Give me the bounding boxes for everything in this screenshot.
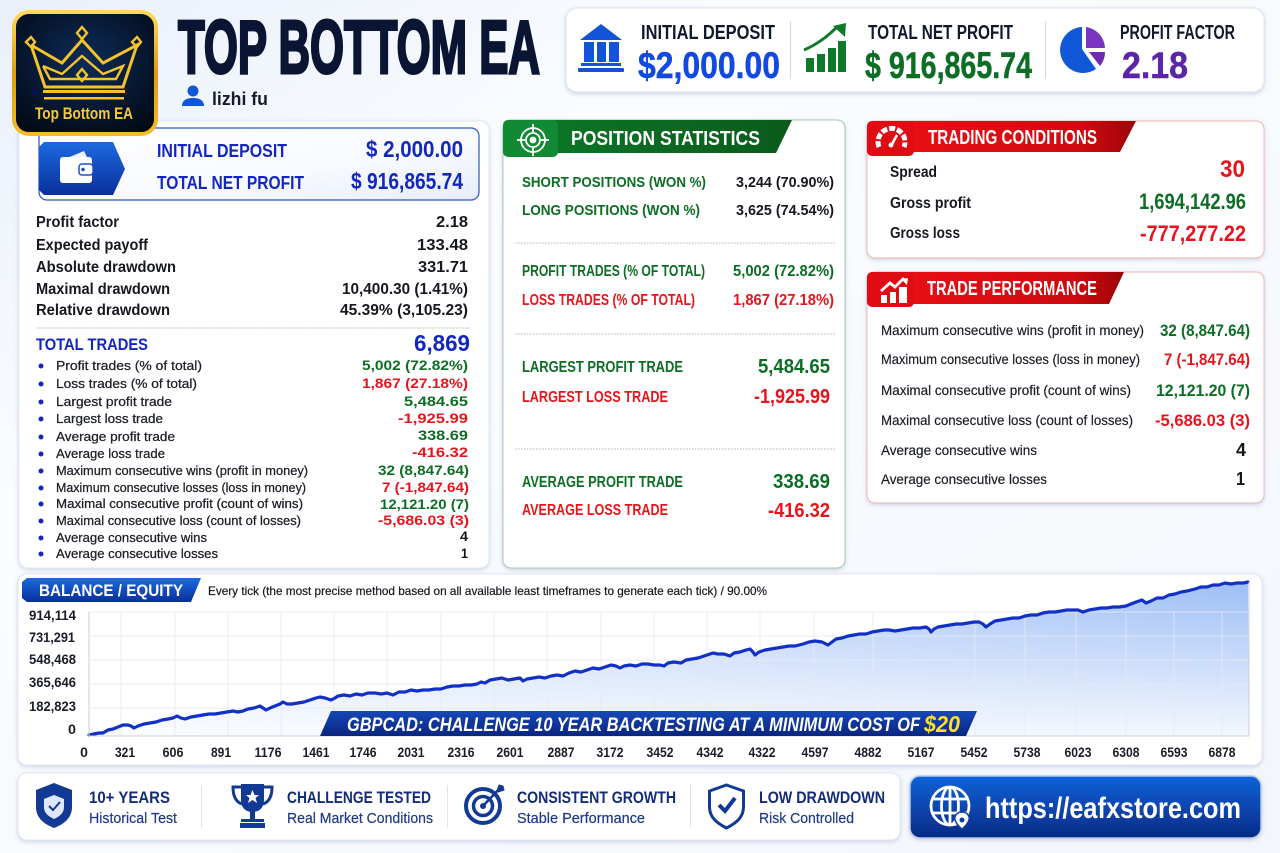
condition rows: Gross profit bbox=[890, 195, 972, 212]
deposit box: $ 2,000.00 bbox=[366, 136, 463, 162]
y axis labels: 548,468 bbox=[29, 651, 76, 667]
trade list values bbox=[362, 357, 469, 561]
feature: challenge tested: Real Market Conditions bbox=[287, 810, 433, 827]
average trade rows: -416.32 bbox=[768, 500, 830, 522]
trade list values: 338.69 bbox=[418, 427, 468, 443]
performance labels: Average consecutive losses bbox=[881, 471, 1047, 487]
x axis labels: 6023 bbox=[1064, 744, 1092, 760]
logo badge: Top Bottom EA bbox=[35, 104, 133, 123]
x axis labels: 1461 bbox=[302, 744, 330, 760]
trade list labels: Largest loss trade bbox=[56, 412, 163, 426]
profit and loss rows: 1,867 (27.18%) bbox=[733, 292, 834, 309]
feature: years: Historical Test bbox=[89, 810, 178, 827]
feature: consistent growth: CONSISTENT GROWTH bbox=[517, 788, 676, 807]
performance values: 4 bbox=[1236, 440, 1246, 460]
performance labels: Maximal consecutive profit (count of wins) bbox=[881, 382, 1131, 398]
deposit box: TOTAL NET PROFIT bbox=[157, 173, 304, 193]
section header: POSITION STATISTICS bbox=[571, 127, 760, 150]
position rows: LONG POSITIONS (WON %) bbox=[522, 202, 700, 219]
largest trade rows: LARGEST LOSS TRADE bbox=[522, 389, 668, 406]
feature: consistent growth: Stable Performance bbox=[517, 810, 645, 827]
profit and loss rows: LOSS TRADES (% OF TOTAL) bbox=[522, 292, 695, 309]
position rows: SHORT POSITIONS (WON %) bbox=[522, 174, 706, 191]
trade list values: 4 bbox=[460, 528, 468, 544]
key metrics: 331.71 bbox=[418, 259, 468, 276]
performance values: 1 bbox=[1236, 469, 1245, 489]
position rows bbox=[522, 174, 834, 219]
position rows: 3,625 (74.54%) bbox=[736, 202, 834, 219]
trade list labels: Average consecutive wins bbox=[56, 531, 207, 545]
y axis labels: 731,291 bbox=[29, 629, 75, 645]
average trade rows: 338.69 bbox=[773, 471, 830, 493]
y axis labels bbox=[29, 607, 76, 737]
panel: trade performance bbox=[867, 272, 1264, 503]
stat: initial deposit: INITIAL DEPOSIT bbox=[641, 22, 775, 44]
section header bbox=[867, 272, 1124, 307]
feature: consistent growth bbox=[466, 785, 676, 827]
performance labels: Average consecutive wins bbox=[881, 442, 1037, 458]
icon: target bbox=[517, 124, 549, 156]
x axis labels: 5167 bbox=[908, 744, 935, 760]
performance labels: Maximal consecutive loss (count of losses) bbox=[881, 412, 1133, 428]
performance values: -5,686.03 (3) bbox=[1155, 411, 1250, 430]
line chart bbox=[89, 582, 1249, 736]
trade list labels: Maximum consecutive wins (profit in money) bbox=[56, 464, 308, 478]
position rows: 3,244 (70.90%) bbox=[736, 174, 834, 191]
condition rows: Gross loss bbox=[890, 225, 960, 242]
trade list values: 1,867 (27.18%) bbox=[362, 375, 468, 391]
y axis labels: 365,646 bbox=[29, 674, 76, 690]
key metrics: Absolute drawdown bbox=[36, 259, 176, 276]
deposit box: INITIAL DEPOSIT bbox=[157, 141, 287, 161]
section header: TRADING CONDITIONS bbox=[928, 127, 1097, 149]
profit and loss rows: 5,002 (72.82%) bbox=[733, 263, 834, 280]
performance values: 12,121.20 (7) bbox=[1156, 381, 1250, 400]
key metrics: 133.48 bbox=[417, 237, 468, 254]
x axis labels: 2316 bbox=[448, 744, 475, 760]
author: lizhi fu bbox=[212, 89, 268, 109]
performance values: 7 (-1,847.64) bbox=[1164, 350, 1250, 369]
feature: years: 10+ YEARS bbox=[89, 788, 170, 807]
stat: total net profit bbox=[865, 22, 1032, 86]
stat: profit factor: 2.18 bbox=[1122, 45, 1188, 86]
total trades: 6,869 bbox=[414, 330, 470, 356]
x axis labels: 4597 bbox=[802, 744, 829, 760]
x axis labels: 1176 bbox=[254, 744, 282, 760]
key metrics: Expected payoff bbox=[36, 237, 149, 254]
icon: bars and arrow bbox=[881, 278, 908, 303]
stat: initial deposit: $2,000.00 bbox=[638, 45, 780, 86]
feature: low drawdown: Risk Controlled bbox=[759, 810, 854, 827]
section header bbox=[503, 120, 792, 157]
condition rows: 30 bbox=[1220, 156, 1245, 183]
key metrics bbox=[36, 214, 468, 319]
icon: wallet bbox=[39, 142, 125, 195]
icon: trophy bbox=[233, 784, 272, 828]
title: TOP BOTTOM EA bbox=[178, 5, 540, 89]
x axis labels: 5452 bbox=[960, 744, 988, 760]
total trades bbox=[36, 330, 470, 356]
y axis labels: 0 bbox=[68, 721, 76, 737]
trade list labels: Largest profit trade bbox=[56, 395, 172, 409]
panel: position statistics bbox=[503, 120, 845, 568]
key metrics: 45.39% (3,105.23) bbox=[340, 302, 468, 319]
stat: initial deposit bbox=[638, 22, 780, 86]
x axis labels: 321 bbox=[115, 744, 135, 760]
trade list values: -5,686.03 (3) bbox=[378, 512, 469, 528]
stat: total net profit: TOTAL NET PROFIT bbox=[868, 22, 1013, 44]
trade list labels bbox=[56, 359, 308, 561]
panel: trading conditions bbox=[867, 121, 1264, 258]
trade list labels: Average loss trade bbox=[56, 447, 165, 461]
trade list values: 5,484.65 bbox=[404, 393, 468, 409]
key metrics: Relative drawdown bbox=[36, 302, 170, 319]
chart badge: BALANCE / EQUITY bbox=[39, 581, 184, 600]
trade list labels: Loss trades (% of total) bbox=[56, 377, 197, 391]
x axis labels: 3172 bbox=[596, 744, 624, 760]
trade list values: 1 bbox=[461, 545, 468, 561]
icon: pie chart bbox=[1060, 27, 1105, 73]
trade list values: 32 (8,847.64) bbox=[378, 462, 469, 478]
icon: globe bbox=[931, 787, 969, 829]
stat: total net profit: $ 916,865.74 bbox=[865, 45, 1032, 86]
performance labels: Maximum consecutive wins (profit in money) bbox=[881, 322, 1144, 338]
condition rows bbox=[890, 156, 1246, 246]
button: website link bbox=[910, 776, 1261, 838]
performance labels bbox=[881, 322, 1144, 487]
largest trade rows bbox=[522, 356, 830, 408]
key metrics: 10,400.30 (1.41%) bbox=[342, 281, 468, 298]
performance values: 32 (8,847.64) bbox=[1160, 321, 1250, 340]
trade list values: 5,002 (72.82%) bbox=[362, 357, 468, 373]
performance values bbox=[1155, 321, 1250, 489]
banner: challenge cost: GBPCAD: CHALLENGE 10 YEAR BACKTESTING AT A MINIMUM COST OF bbox=[347, 714, 921, 736]
x axis labels: 606 bbox=[162, 744, 184, 760]
y axis labels: 914,114 bbox=[29, 607, 76, 623]
banner: challenge cost: $20 bbox=[923, 711, 960, 737]
stat: profit factor bbox=[1120, 22, 1235, 86]
x axis labels: 2031 bbox=[398, 744, 425, 760]
icon: shield outline bbox=[710, 785, 744, 828]
x axis labels: 0 bbox=[80, 744, 88, 760]
average trade rows: AVERAGE PROFIT TRADE bbox=[522, 474, 683, 491]
stat: profit factor: PROFIT FACTOR bbox=[1120, 22, 1235, 44]
trade list labels: Average consecutive losses bbox=[56, 547, 218, 561]
icon: bank bbox=[578, 24, 624, 72]
largest trade rows: 5,484.65 bbox=[758, 356, 830, 378]
feature: low drawdown: LOW DRAWDOWN bbox=[759, 788, 885, 807]
icon: growth chart bbox=[804, 23, 846, 72]
trade list labels: Maximum consecutive losses (loss in money) bbox=[56, 481, 306, 495]
performance labels: Maximum consecutive losses (loss in money) bbox=[881, 351, 1140, 367]
deposit box: $ 916,865.74 bbox=[351, 168, 463, 194]
key metrics: Maximal drawdown bbox=[36, 281, 170, 298]
x axis labels: 2601 bbox=[496, 744, 524, 760]
x axis labels: 2887 bbox=[548, 744, 575, 760]
condition rows: -777,277.22 bbox=[1140, 221, 1246, 246]
trade list labels: Profit trades (% of total) bbox=[56, 359, 202, 373]
condition rows: Spread bbox=[890, 164, 937, 181]
x axis labels: 1746 bbox=[350, 744, 377, 760]
trade list values: -416.32 bbox=[412, 444, 468, 460]
trade list labels: Average profit trade bbox=[56, 430, 175, 444]
trade list values: -1,925.99 bbox=[398, 410, 468, 426]
icon: shield bbox=[36, 783, 72, 828]
logo badge bbox=[14, 12, 156, 134]
largest trade rows: -1,925.99 bbox=[754, 386, 830, 408]
trade list labels: Maximal consecutive profit (count of wins) bbox=[56, 497, 303, 511]
x axis labels: 6593 bbox=[1160, 744, 1188, 760]
author bbox=[182, 86, 268, 109]
average trade rows: AVERAGE LOSS TRADE bbox=[522, 502, 668, 519]
largest trade rows: LARGEST PROFIT TRADE bbox=[522, 359, 683, 376]
x axis labels: 4342 bbox=[696, 744, 724, 760]
y axis labels: 182,823 bbox=[29, 698, 76, 714]
section header: TRADE PERFORMANCE bbox=[927, 278, 1097, 300]
average trade rows bbox=[522, 471, 830, 522]
key metrics: 2.18 bbox=[436, 214, 468, 231]
panel: feature strip bbox=[18, 773, 900, 840]
total trades: TOTAL TRADES bbox=[36, 335, 148, 354]
x axis labels: 891 bbox=[211, 744, 231, 760]
panel: top summary bbox=[566, 8, 1264, 92]
feature: challenge tested bbox=[233, 784, 433, 828]
key metrics: Profit factor bbox=[36, 214, 119, 231]
trade list labels: Maximal consecutive loss (count of losses) bbox=[56, 514, 301, 528]
profit and loss rows: PROFIT TRADES (% OF TOTAL) bbox=[522, 263, 705, 280]
profit and loss rows bbox=[522, 263, 834, 309]
x axis labels: 4882 bbox=[854, 744, 882, 760]
x axis labels: 4322 bbox=[748, 744, 776, 760]
panel: balance and equity chart bbox=[18, 574, 1262, 765]
feature: low drawdown bbox=[710, 785, 885, 828]
icon: user bbox=[182, 86, 204, 106]
icon: gauge bbox=[878, 128, 905, 148]
trade list bullets bbox=[38, 364, 44, 556]
feature: challenge tested: CHALLENGE TESTED bbox=[287, 788, 431, 807]
deposit box bbox=[39, 128, 479, 200]
chart description: Every tick (the most precise method based on all available least timeframes to generate each tick) / 90.00% bbox=[208, 584, 767, 598]
x axis labels: 6308 bbox=[1112, 744, 1140, 760]
x axis labels: 5738 bbox=[1014, 744, 1041, 760]
panel: account summary bbox=[19, 121, 489, 568]
trade list values: 12,121.20 (7) bbox=[380, 496, 469, 512]
trade list values: 7 (-1,847.64) bbox=[382, 479, 469, 495]
section header bbox=[867, 121, 1136, 156]
button: website link: https://eafxstore.com bbox=[985, 792, 1241, 825]
x axis labels: 3452 bbox=[646, 744, 674, 760]
x axis labels bbox=[80, 744, 1236, 760]
x axis labels: 6878 bbox=[1208, 744, 1236, 760]
feature: years bbox=[36, 783, 178, 828]
condition rows: 1,694,142.96 bbox=[1139, 189, 1246, 214]
icon: target with arrow bbox=[466, 785, 504, 823]
